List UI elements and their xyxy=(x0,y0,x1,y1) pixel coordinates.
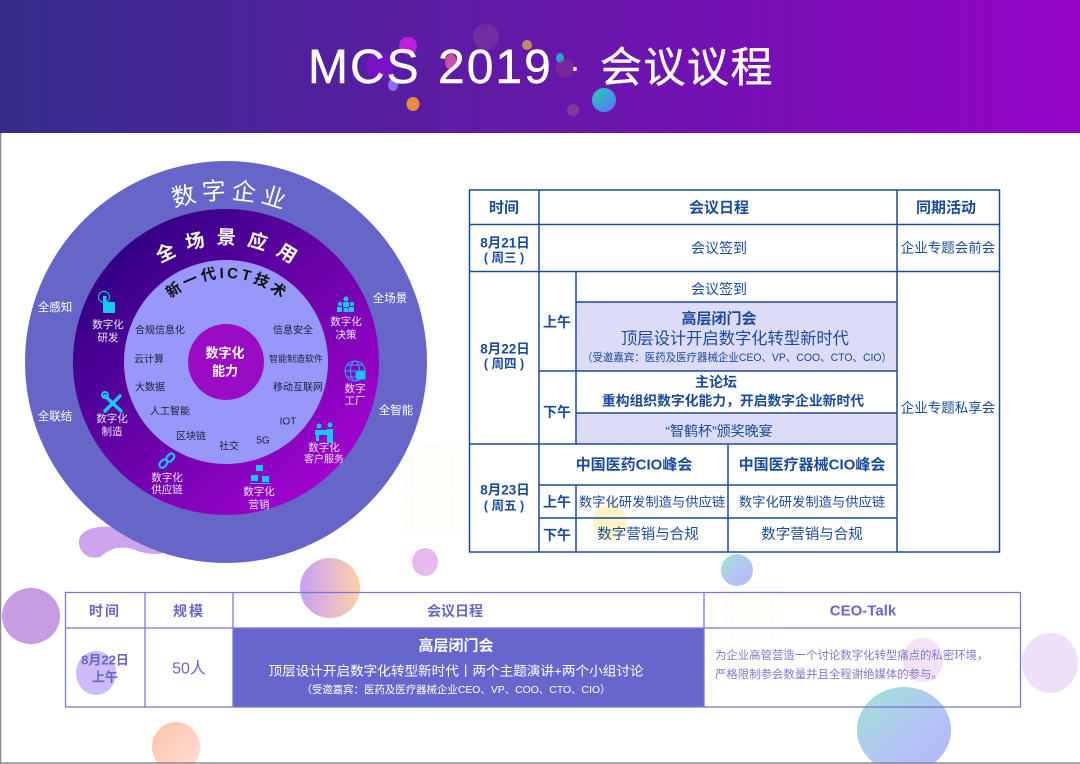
circle diagram xyxy=(25,161,427,563)
row: Aug 23: 数字营销与合规 xyxy=(597,526,699,543)
title: · xyxy=(570,50,580,84)
row: Aug 22: 顶层设计开启数字化转型新时代 xyxy=(621,330,849,348)
table header: 同期活动 xyxy=(916,200,976,216)
inner ring: new generation ICT: 合规信息化 xyxy=(135,324,185,336)
table header xyxy=(89,602,897,620)
row: Aug 22: ( 周四 ) xyxy=(484,357,524,371)
icon: digital R&D xyxy=(98,292,115,313)
label: digital manufacturing: 数字化 xyxy=(96,412,128,425)
icon: digital decision xyxy=(337,296,354,312)
outer ring: digital enterprise: 全智能 xyxy=(379,403,414,417)
icon: digital manufacturing xyxy=(102,392,121,411)
label: digital decision: 决策 xyxy=(336,328,357,341)
icon: digital supply chain xyxy=(158,452,176,469)
outer ring: digital enterprise: 数字企业 xyxy=(171,179,286,210)
size cell: 50人 xyxy=(172,660,206,678)
label: digital supply chain: 数字化 xyxy=(151,471,183,484)
title: 2019 xyxy=(438,40,553,94)
inner ring: new generation ICT: 社交 xyxy=(219,440,239,452)
label: digital decision: 数字化 xyxy=(330,315,362,328)
outer ring: digital enterprise: 全感知 xyxy=(38,300,72,314)
CEO-Talk description: 严格限制参会数量并且全程谢绝媒体的参与。 xyxy=(715,667,943,681)
inner ring: new generation ICT: 新一代ICT技术 xyxy=(164,266,286,298)
row: Aug 23: ( 周五 ) xyxy=(484,499,524,513)
row: Aug 21 xyxy=(480,236,995,265)
inner ring: new generation ICT: 云计算 xyxy=(134,352,164,366)
inner ring: new generation ICT: 信息安全 xyxy=(273,324,313,336)
inner ring: new generation ICT: IOT xyxy=(280,416,296,428)
label: digital manufacturing: 制造 xyxy=(102,425,123,438)
row: Aug 22: 重构组织数字化能力，开启数字企业新时代 xyxy=(602,392,864,408)
row: Aug 23: 8月23日 xyxy=(480,482,530,498)
table header: 时间 xyxy=(489,200,519,216)
row: Aug 23: 中国医疗器械CIO峰会 xyxy=(739,456,885,474)
time cell: 8月22日 xyxy=(81,652,129,668)
label: digital marketing: 数字化 xyxy=(243,485,275,498)
session cell text xyxy=(268,636,644,696)
label: digital marketing xyxy=(243,485,275,511)
center: digital capability: 能力 xyxy=(212,364,238,378)
row: Aug 23 xyxy=(480,456,885,543)
middle ring: all-scenario applications: 全场景应用 xyxy=(156,228,298,264)
icon: digital factory xyxy=(345,361,365,381)
title: MCS xyxy=(308,40,421,94)
outer ring: digital enterprise xyxy=(25,161,427,563)
schedule table xyxy=(469,190,1000,552)
row: Aug 23: 数字营销与合规 xyxy=(761,526,863,543)
row: Aug 22: 下午 xyxy=(543,404,571,420)
header bubbles xyxy=(366,24,616,116)
row: Aug 22: 8月22日 xyxy=(480,342,530,356)
row: Aug 21: ( 周三 ) xyxy=(484,251,524,265)
row: Aug 23: 中国医药CIO峰会 xyxy=(576,456,692,474)
row: Aug 21: 会议签到 xyxy=(691,240,747,256)
center: digital capability xyxy=(188,324,264,400)
table header: CEO-Talk xyxy=(830,602,897,620)
label: digital factory: 工厂 xyxy=(344,395,366,407)
label: digital customer service xyxy=(304,441,344,466)
background bubbles xyxy=(2,445,1078,764)
row: Aug 22: 主论坛 xyxy=(695,374,737,390)
highlighted rows xyxy=(576,302,897,444)
outer ring: digital enterprise: 全联结 xyxy=(38,409,72,423)
table header: 会议日程 xyxy=(689,198,749,216)
middle ring: all-scenario applications xyxy=(73,209,379,515)
inner ring: new generation ICT: 智能制造软件 xyxy=(269,353,323,364)
header banner xyxy=(0,0,1080,133)
row: Aug 21: 8月21日 xyxy=(480,236,530,250)
label: digital R&D: 数字化 xyxy=(92,318,124,331)
table grid xyxy=(65,592,1021,707)
side activity: 企业专题私享会 xyxy=(901,400,995,416)
label: digital R&D: 研发 xyxy=(98,331,119,344)
row: Aug 22: 会议签到 xyxy=(691,281,747,297)
title: 会议议程 xyxy=(600,44,774,90)
row: Aug 22: （受邀嘉宾：医药及医疗器械企业CEO、VP、COO、CTO、CIO） xyxy=(582,350,892,364)
label: digital factory xyxy=(344,382,366,407)
table header xyxy=(489,198,976,216)
label: digital R&D xyxy=(92,318,124,344)
inner ring: new generation ICT: 大数据 xyxy=(135,380,165,394)
time cell: 上午 xyxy=(92,670,118,684)
table header: 会议日程 xyxy=(427,603,483,619)
label: digital factory: 数字 xyxy=(344,382,366,395)
session cell text: （受邀嘉宾：医药及医疗器械企业CEO、VP、COO、CTO、CIO） xyxy=(302,683,610,696)
row: Aug 23: 数字化研发制造与供应链 xyxy=(739,494,885,510)
icon: digital customer service xyxy=(315,422,333,443)
label: digital customer service: 数字化 xyxy=(308,441,340,454)
session cell text: 顶层设计开启数字化转型新时代丨两个主题演讲+两个小组讨论 xyxy=(268,664,644,678)
row: Aug 22 xyxy=(480,281,892,439)
inner ring: new generation ICT: 人工智能 xyxy=(150,404,190,418)
inner ring: new generation ICT xyxy=(124,260,328,464)
inner ring: new generation ICT: 5G xyxy=(256,436,270,446)
label: digital manufacturing xyxy=(96,412,128,438)
row: Aug 22: 上午 xyxy=(543,314,571,330)
outer ring: digital enterprise: 全场景 xyxy=(373,291,407,305)
table header: 时间 xyxy=(89,603,121,619)
CEO-Talk description: 为企业高管营造一个讨论数字化转型痛点的私密环境， xyxy=(715,648,988,662)
row: Aug 23: 下午 xyxy=(543,527,571,543)
row: Aug 22: 高层闭门会 xyxy=(681,310,757,328)
icon: digital marketing xyxy=(250,465,270,484)
row: Aug 22: “智鹤杯”颁奖晚宴 xyxy=(665,423,773,439)
session cell text: 高层闭门会 xyxy=(418,636,494,654)
time cell xyxy=(81,652,129,684)
label: digital decision xyxy=(330,315,362,341)
label: digital marketing: 营销 xyxy=(248,498,270,511)
table header: 规模 xyxy=(173,603,205,619)
label: digital customer service: 客户服务 xyxy=(304,452,344,466)
CEO-Talk description xyxy=(715,648,988,681)
inner ring: new generation ICT: 移动互联网 xyxy=(273,380,323,394)
table grid xyxy=(469,190,1000,552)
inner ring: new generation ICT: 区块链 xyxy=(176,430,206,442)
row: Aug 23: 上午 xyxy=(543,494,571,510)
label: digital supply chain: 供应链 xyxy=(151,483,183,496)
row: Aug 21: 企业专题会前会 xyxy=(901,240,995,256)
filled cell xyxy=(233,628,704,707)
center: digital capability: 数字化 xyxy=(205,346,245,360)
label: digital supply chain xyxy=(151,471,183,496)
CEO-Talk table xyxy=(65,592,1021,707)
row: Aug 23: 数字化研发制造与供应链 xyxy=(579,494,725,510)
